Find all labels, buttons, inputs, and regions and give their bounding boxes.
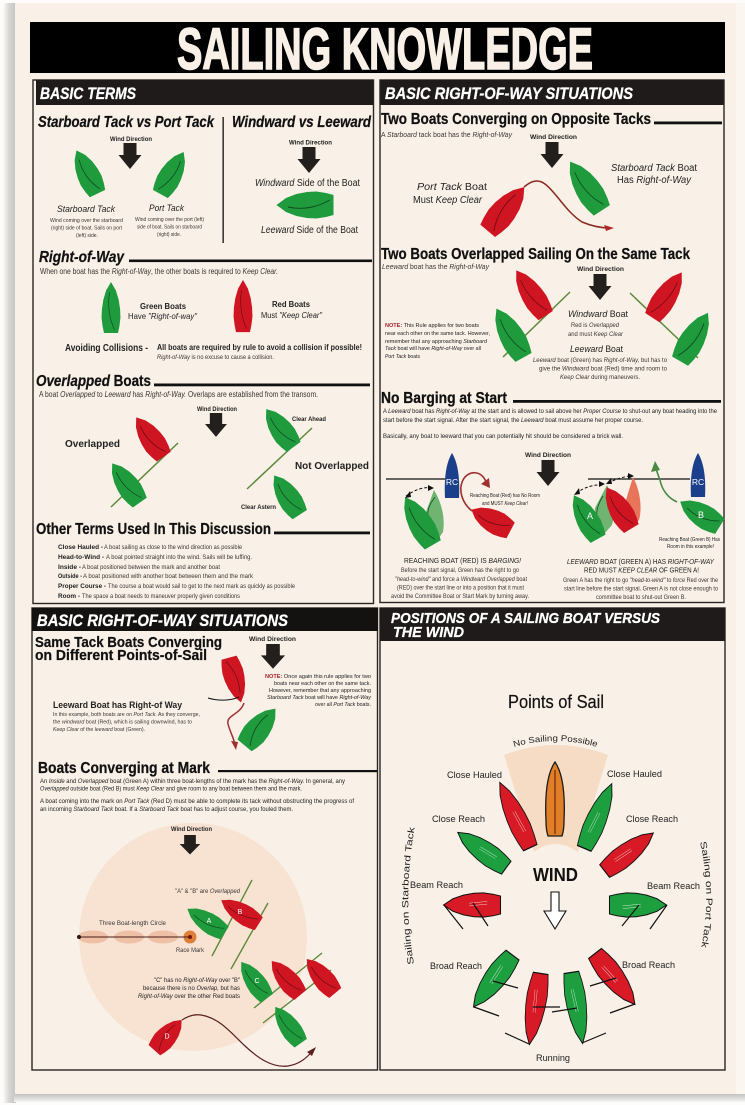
diagram: boat d with course: D [164, 1034, 170, 1040]
wind direction arrow: Wind Direction [249, 636, 296, 643]
label: reaching boat red: and MUST Keep Clear! [482, 501, 529, 507]
subheading: other terms: Other Terms Used In This Discussion [36, 521, 271, 538]
label: sailing on port tack: Sailing on Port Tack [700, 842, 712, 948]
text: starboard tack: (right) side of boat. Sails on port [51, 226, 122, 232]
subheading: same tack boats converging: Same Tack Boats Converging [35, 634, 222, 651]
wind direction arrow [577, 266, 624, 300]
text: leeward boat has right-of-way [563, 557, 718, 601]
diagram: barging left: RC [446, 477, 458, 487]
text: port tack: Wind coming over the port (left) [135, 217, 204, 223]
wind direction arrow: Wind Direction [171, 827, 212, 833]
note: NOTE: Once again this rule applies for two [265, 674, 371, 680]
label: starboard tack boat: Starboard Tack Boat [611, 163, 697, 174]
wind direction arrow: Wind Direction [110, 137, 152, 143]
text: starboard tack: Wind coming over the starboard [50, 218, 123, 224]
text: leeward boat has right-of-way [53, 700, 200, 733]
label: no sailing possible: No Sailing Possible [513, 735, 598, 747]
wind direction arrow [171, 827, 212, 854]
label: sailing on starboard tack: Sailing on Starboard Tack [402, 827, 415, 964]
icon: red port boat with course arrow [478, 179, 614, 239]
text: no barging description: start before the start signal. After the start signal, the Leeward boat must assume her proper course. [383, 417, 643, 424]
label: wind: WIND [533, 865, 578, 885]
label: race mark: Race Mark [176, 948, 205, 954]
text: leeward boat [533, 344, 667, 381]
panel: positions of a sailing boat versus the wind [379, 607, 726, 1071]
icon: beam reach green boat [610, 893, 667, 929]
note [265, 674, 371, 708]
text: reaching boat barging: avoid the Committee Boat or Start Mark by turning away. [391, 593, 529, 600]
icon: orange head-to-wind boat [546, 762, 564, 836]
wind direction arrow [197, 407, 237, 437]
text: mark rules: An Inside and Overlapped boat (Green A) within three boat-lengths of the mark has the Right-of-Way. In general, any [40, 779, 345, 785]
diagram: boats a and b [182, 880, 268, 969]
heading: basic terms: BASIC TERMS [40, 84, 137, 103]
label: reaching boat green [659, 537, 720, 550]
label: clear ahead: Clear Ahead [292, 416, 326, 423]
note: Tack boat will have Right-of-Way over all [385, 346, 481, 352]
green boats label [128, 302, 198, 321]
diagram: boat c group: C [254, 978, 260, 985]
note: over all Port Tack boats. [315, 702, 371, 708]
diagram: not overlapped boats [247, 402, 312, 521]
label: beam reach right: Beam Reach [647, 881, 700, 892]
icon: broad reach green boat [465, 948, 521, 1016]
list: other terms: A boat pointed straight into the wind. Sails will be luffing. [106, 554, 252, 561]
subheading: right-of-way: Right-of-Way [39, 249, 125, 266]
note: Port Tack boats [385, 354, 420, 360]
text: c note [138, 978, 240, 1000]
panel: basic right-of-way situations (lower) [32, 608, 378, 1070]
subheading: same tack boats converging: on Different Points-of-Sail [35, 647, 207, 664]
label: broad reach left: Broad Reach [430, 961, 482, 972]
no sailing zone [504, 745, 608, 852]
wind direction arrow [289, 140, 332, 173]
text: avoiding collisions: Avoiding Collisions - [65, 343, 148, 354]
heading: positions of a sailing boat: POSITIONS OF A SAILING BOAT VERSUS [391, 610, 660, 627]
note [385, 323, 490, 360]
text: leeward boat has right-of-way: In this example, both boats are on Port Tack. As they converge, [53, 712, 200, 718]
text: c note: because there is no Overlap, but has [143, 986, 240, 992]
text: mark rules: an incoming Starboard Tack boat. If a Starboard Tack boat has to adjust course, you fouled them. [40, 807, 293, 813]
label: beam reach left: Beam Reach [410, 880, 463, 891]
text: overlapped rule: A boat Overlapped to Leeward has Right-of-Way. Overlaps are established from the transom. [39, 390, 318, 399]
text: c note: "C" has no Right-of-Way over "B" [154, 978, 240, 984]
wind direction arrow [530, 134, 577, 168]
label: reaching boat green: Room in this example! [667, 544, 714, 550]
red boats label: Must "Keep Clear" [261, 311, 323, 320]
diagram: boat d with course [147, 1013, 316, 1066]
list: other terms: A boat positioned with another boat between them and the mark [83, 573, 254, 580]
icon: running red boat [505, 972, 560, 1046]
text: leeward boat has right-of-way: the windward boat (Red), which is sailing downwind, has to [53, 720, 192, 726]
diagram: barging right: B [698, 510, 704, 520]
diagram: overlapped boats [103, 411, 178, 509]
icon: close reach green boat [451, 824, 513, 876]
label: port tack boat: Must Keep Clear [413, 195, 483, 206]
text: port tack: side of boat. Sails on starboard [137, 224, 202, 230]
text: leeward boat has right-of-way: start line before the start signal. Green A is not close enough to [564, 586, 718, 592]
text: no barging description: Basically, any boat to leeward that you can potentially hit should be considered a brick wall. [383, 433, 623, 440]
subheading: same tack boats converging [35, 634, 222, 664]
diagram: same tack boats [208, 655, 285, 753]
diagram: barging right: A [587, 511, 593, 521]
label: starboard tack boat [611, 163, 697, 186]
text: leeward boat has right-of-way: Keep Clear of the leeward boat (Green). [53, 727, 145, 733]
text: reaching boat barging: (RED) over the start line or into a position that it must [397, 584, 524, 592]
text: windward boat [568, 309, 628, 338]
note: However, remember that any approaching [269, 688, 371, 694]
heading: basic right-of-way situations: BASIC RIGHT-OF-WAY SITUATIONS [385, 84, 634, 103]
windward label: Windward Side of the Boat [255, 178, 360, 189]
label: reaching boat red [470, 493, 540, 507]
icon: beam reach red boat [444, 893, 500, 929]
wind direction arrow: Wind Direction [525, 452, 571, 459]
note: remember that any approaching Starboard [385, 339, 488, 345]
text: right-of-way rule: When one boat has the Right-of-Way, the other boats is required to Keep Clear. [40, 267, 278, 276]
heading: basic terms [36, 80, 373, 105]
diagram: boat c group [233, 952, 343, 1049]
wind direction arrow [110, 137, 152, 169]
label: running: Running [536, 1053, 570, 1064]
icon: broad reach red boat [586, 947, 644, 1013]
diagram: barging right: RC [692, 477, 704, 487]
wind direction arrow [525, 452, 571, 486]
text: c note: Right-of-Way over the other Red boats [138, 994, 240, 1000]
list: other terms: A boat positioned between the mark and another boat [82, 564, 220, 571]
text: mark rules [40, 779, 354, 813]
label: reaching boat red: Reaching Boat (Red) has No Room [470, 493, 540, 499]
icon: running green boat [552, 971, 606, 1045]
panel: basic terms [33, 80, 374, 604]
list: other terms: Inside - [58, 564, 81, 571]
subheading: windward vs leeward: Windward vs Leeward [232, 114, 371, 131]
text: leeward boat has right-of-way: Green A has the right to go "head-to-wind" to force Red over the [563, 577, 718, 584]
text: reaching boat barging: Before the start signal, Green has the right to go [401, 567, 519, 574]
subheading: boats converging at mark: Boats Converging at Mark [38, 760, 210, 777]
heading: positions of a sailing boat: THE WIND [393, 624, 464, 641]
text: leeward boat: Leeward boat (Green) has Right-of-Way, but has to [533, 357, 667, 364]
heading: basic right-of-way situations [32, 608, 378, 631]
label: overlapped: Overlapped [65, 438, 120, 450]
label: a and b overlapped: "A" & "B" are Overlapped [175, 889, 241, 895]
icon: green boat [102, 282, 120, 333]
text: leeward boat has right-of-way: LEEWARD BOAT (GREEN A) HAS RIGHT-OF-WAY [567, 557, 715, 566]
text: mark rules: Overlapped outside boat (Red B) must Keep Clear and give room to any boat between them and the mark. [40, 786, 302, 792]
list: other terms: Proper Course - [58, 583, 106, 590]
diagram: three boat-length circle [77, 823, 307, 1051]
list: other terms: The space a boat needs to maneuver properly given conditions [82, 593, 240, 600]
text: starboard tack: (left) side. [76, 233, 98, 239]
diagram: left overlapped boats [486, 264, 570, 363]
label: not overlapped: Not Overlapped [295, 460, 369, 472]
diagram: barging right [564, 453, 726, 544]
icon: port tack boat [150, 146, 194, 200]
icon: close hauled green boat [575, 780, 621, 852]
heading: basic right-of-way situations: BASIC RIGHT-OF-WAY SITUATIONS [37, 611, 289, 630]
wind direction arrow: Wind Direction [530, 134, 577, 141]
text: avoiding collisions: Right-of-Way is no excuse to cause a collision. [157, 354, 274, 361]
label: close hauled right: Close Hauled [607, 769, 662, 780]
title: points of sail: Points of Sail [508, 692, 604, 712]
text: windward boat: Red is Overlapped [571, 322, 619, 329]
list: other terms: Head-to-Wind - [58, 554, 104, 561]
text: leeward boat has right-of-way: Leeward Boat has Right-of Way [53, 700, 183, 711]
wind direction arrow: Wind Direction [289, 140, 332, 146]
diagram: barging left [386, 453, 516, 551]
subheading: overlapped boats: Overlapped Boats [36, 373, 151, 390]
text: leeward boat: give the Windward boat (Red) time and room to [539, 366, 667, 372]
list: other terms: Room - [58, 593, 80, 600]
text: avoiding collisions [65, 343, 362, 361]
text: port tack: (right) side. [157, 232, 181, 238]
text: windward boat: Windward Boat [568, 309, 628, 320]
label: port tack boat [413, 182, 487, 206]
text: leeward rule: Leeward boat has the Right-of-Way [382, 264, 489, 271]
wind direction arrow [249, 636, 296, 669]
label: reaching boat green: Reaching Boat (Green B) Has [659, 537, 720, 543]
text: mark rules: A boat coming into the mark on Port Tack (Red D) must be able to complete its tack without obstructing the progress of [40, 799, 354, 805]
text: avoiding collisions: All boats are required by rule to avoid a collision if possible! [157, 343, 362, 352]
subheading: starboard tack vs port tack: Starboard Tack vs Port Tack [38, 114, 215, 131]
label: close hauled left: Close Hauled [447, 770, 502, 781]
list: other terms: Close Hauled - [58, 544, 103, 551]
text: starboard rule: A Starboard tack boat has the Right-of-Way [381, 132, 512, 139]
text: windward boat: and must Keep Clear [568, 331, 624, 338]
label: close reach left: Close Reach [432, 814, 485, 825]
icon: close reach red boat [598, 824, 660, 880]
text: reaching boat barging: REACHING BOAT (RED) IS BARGING! [404, 556, 522, 565]
text: leeward boat: Leeward Boat [570, 344, 623, 355]
subheading: no barging: No Barging at Start [381, 390, 507, 407]
text: leeward boat: Keep Clear during maneuvers. [560, 374, 640, 381]
label: close reach right: Close Reach [626, 814, 678, 825]
green boats label: Have "Right-of-way" [128, 312, 198, 321]
label: port tack boat: Port Tack Boat [417, 182, 487, 193]
arrow: wind direction [544, 892, 566, 929]
diagram: right overlapped boats [630, 266, 719, 367]
text: port tack [135, 203, 204, 238]
label: clear astern: Clear Astern [241, 504, 276, 511]
list: other terms [58, 544, 296, 600]
label: starboard tack boat: Has Right-of-Way [617, 175, 692, 186]
text: leeward boat has right-of-way: RED MUST KEEP CLEAR OF GREEN A! [584, 566, 699, 574]
green boats label: Green Boats [140, 302, 187, 311]
panel: basic right-of-way situations (upper) [380, 80, 726, 602]
icon: red boat [234, 280, 252, 332]
list: other terms: The course a boat would sail to get to the next mark as quickly as possible [108, 583, 296, 590]
note: Starboard Tack boat will have Right-of-Way [267, 695, 371, 701]
text: no barging description [383, 408, 717, 440]
icon: close hauled red boat [491, 778, 539, 852]
diagram: boats a and b: A [207, 918, 212, 925]
note: NOTE: This Rule applies for two boats [385, 323, 479, 329]
text: port tack: Port Tack [149, 203, 185, 214]
text: starboard tack: Starboard Tack [57, 204, 116, 215]
list: other terms: Outside - [58, 573, 82, 580]
text: leeward boat has right-of-way: committee boat to shut-out Green B. [596, 594, 686, 601]
label: three boat-length circle: Three Boat-length Circle [99, 921, 167, 927]
icon: starboard tack boat [66, 145, 108, 199]
icon: windward boat [276, 192, 334, 218]
text: reaching boat barging [391, 556, 529, 600]
text: reaching boat barging: "head-to-wind" and force a Windward Overlapped boat [395, 576, 527, 583]
subheading: opposite tacks: Two Boats Converging on Opposite Tacks [381, 111, 651, 128]
note: boats near each other on the same tack. [274, 681, 371, 687]
heading: positions of a sailing boat [380, 608, 725, 641]
text: no barging description: A Leeward boat has Right-of-Way at the start and is allowed to sail above her Proper Course to shut-out any boat heading into the [383, 408, 717, 415]
leeward label: Leeward Side of the Boat [261, 225, 358, 236]
red boats label [261, 300, 323, 320]
list: other terms: A boat sailing as close to the wind direction as possible [104, 544, 243, 551]
subheading: same tack: Two Boats Overlapped Sailing On the Same Tack [381, 246, 690, 263]
icon: green starboard boat [559, 155, 613, 217]
red boats label: Red Boats [272, 300, 311, 309]
note: near each other on the same tack. However, [385, 331, 490, 337]
diagram: boats a and b: B [238, 909, 243, 916]
wind direction arrow: Wind Direction [197, 407, 237, 413]
wind direction arrow: Wind Direction [577, 266, 624, 273]
text: starboard tack [50, 204, 123, 239]
label: broad reach right: Broad Reach [622, 960, 675, 971]
heading: basic right-of-way situations [380, 80, 724, 105]
